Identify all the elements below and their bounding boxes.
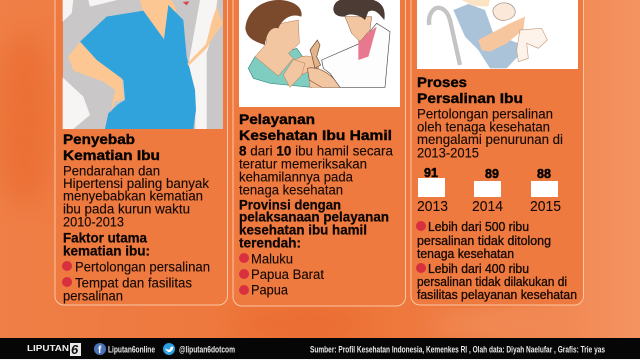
text block: 8 dari 10 <box>239 144 393 198</box>
list: catatan: tenaga kesehatan <box>417 247 514 261</box>
text block: causes: Hipertensi paling banyak <box>63 176 209 191</box>
bar chart: persalinan per year: 88 <box>537 167 551 181</box>
illustration: pregnant woman <box>63 0 223 129</box>
text block: 8 dari 10: 8 dari 10 ibu hamil secara <box>239 144 393 158</box>
list: faktor: persalinan <box>63 288 123 304</box>
subheading: faktor utama <box>63 230 150 258</box>
text block: 8 dari 10: kehamilannya pada <box>239 170 353 184</box>
list: catatan: fasilitas pelayanan kesehatan <box>417 288 577 302</box>
heading: Pelayanan <box>239 111 315 127</box>
bar chart: persalinan per year: 2015 <box>530 198 561 215</box>
text block: causes <box>63 164 209 230</box>
text block: pertolongan: oleh tenaga kesehatan <box>417 120 550 134</box>
logo: liputan6: 6 <box>71 342 79 357</box>
panel: penyebab kematian ibu <box>55 0 228 305</box>
subheading: provinsi: Provinsi dengan <box>239 198 341 212</box>
icon: facebook: f <box>98 345 102 356</box>
text block: pertolongan: mengalami penurunan di <box>417 132 563 147</box>
text block: causes: ibu pada kurun waktu <box>63 202 190 216</box>
list: faktor: Tempat dan fasilitas <box>75 276 192 290</box>
bar chart: persalinan per year <box>417 166 561 215</box>
bar chart: persalinan per year: 89 <box>485 167 499 181</box>
illustration: vaccination <box>239 0 400 107</box>
panel: proses persalinan ibu <box>411 0 584 305</box>
text block: pertolongan <box>417 106 563 160</box>
bar chart: persalinan per year: 2013 <box>417 198 448 215</box>
list: catatan: Lebih dari 500 ribu <box>428 220 529 234</box>
heading: Kesehatan Ibu Hamil <box>239 127 392 143</box>
subheading: faktor utama: kematian ibu: <box>63 244 150 258</box>
heading: Kematian Ibu <box>63 147 160 163</box>
logo: liputan6 <box>27 342 81 357</box>
list: provinsi: Papua Barat <box>251 267 324 282</box>
logo: liputan6: LIPUTAN <box>27 344 69 353</box>
list: provinsi <box>239 252 324 298</box>
heading <box>239 111 392 143</box>
text block: pertolongan: Pertolongan persalinan <box>417 106 553 122</box>
text block: pertolongan: 2013-2015 <box>417 146 479 160</box>
list: catatan: persalinan tidak ditolong <box>417 234 551 248</box>
list: provinsi: Maluku <box>251 252 293 266</box>
facebook handle: Liputan6online <box>108 344 155 354</box>
heading: Penyebab <box>63 131 135 147</box>
subheading: faktor utama: Faktor utama <box>63 230 147 246</box>
list: catatan <box>416 220 577 302</box>
list: faktor <box>62 260 210 304</box>
text block: causes: 2010-2013 <box>63 214 124 230</box>
heading <box>63 131 160 163</box>
list: catatan: Lebih dari 400 ribu <box>428 262 529 276</box>
subheading: provinsi: kesehatan ibu hamil <box>239 222 367 238</box>
text block: 8 dari 10: tenaga kesehatan <box>239 182 343 198</box>
text block: causes: menyebabkan kematian <box>63 188 203 204</box>
footer bar <box>0 338 640 360</box>
icon: twitter <box>163 343 175 355</box>
text block: causes: Pendarahan dan <box>63 164 160 178</box>
text block: 8 dari 10: teratur memeriksakan <box>239 156 367 172</box>
panel: pelayanan kesehatan ibu hamil <box>233 0 406 306</box>
heading: Persalinan Ibu <box>417 90 523 106</box>
icon: facebook <box>94 343 106 356</box>
subheading: provinsi: terendah: <box>239 236 301 250</box>
illustration: mother and baby <box>417 0 578 69</box>
bar chart: persalinan per year: 2014 <box>472 198 503 215</box>
bar chart: persalinan per year: 91 <box>424 166 438 180</box>
subheading: provinsi: pelaksanaan pelayanan <box>239 210 389 224</box>
subheading: provinsi <box>239 198 389 250</box>
list: provinsi: Papua <box>251 282 288 298</box>
list: catatan: persalinan tidak dilakukan di <box>417 275 567 289</box>
twitter handle: @liputan6dotcom <box>179 344 235 354</box>
heading <box>417 74 523 106</box>
list: faktor: Pertolongan persalinan <box>75 260 210 274</box>
heading: Proses <box>417 74 467 90</box>
